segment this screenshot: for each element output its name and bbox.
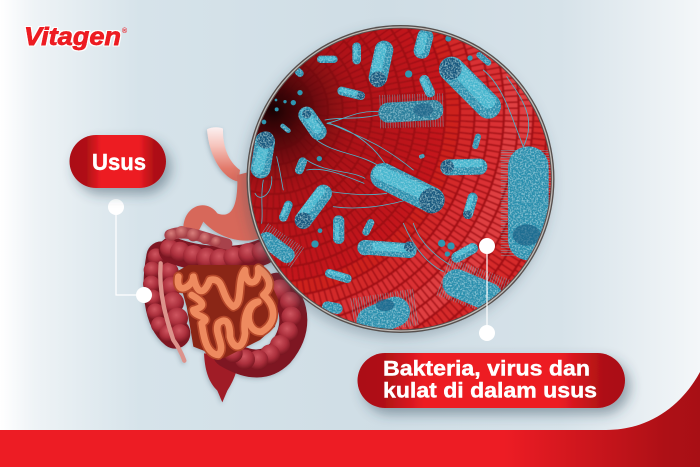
rod bacteria [257,37,488,309]
label: Bakteria, virus dan kulat di dalam usus: kulat di dalam usus [383,380,597,402]
magnifier circle: bacteria in the intestine [237,24,558,344]
stomach [183,170,263,241]
label: Usus: Usus [92,149,146,175]
illustration: digestive system [143,127,301,402]
small intestine [177,265,278,358]
label: Bakteria, virus dan kulat di dalam usus [358,353,625,408]
connector: Usus label to intestine [108,199,152,303]
label: Bakteria, virus dan kulat di dalam usus: Bakteria, virus dan [383,358,590,380]
colon [143,226,301,370]
fuzzy bacteria [262,103,541,322]
oesophagus [207,127,240,182]
label: Usus [70,135,166,188]
connector: bacteria label to magnified view [479,238,495,341]
bottom red band [0,372,700,467]
rectum [204,353,238,402]
logo: Vitagen: Vitagen [24,23,121,51]
logo: Vitagen: ® [122,27,128,35]
red intestinal wall [250,28,551,330]
appendix band [160,263,184,361]
flagella [255,70,529,272]
small cocci [262,36,473,257]
